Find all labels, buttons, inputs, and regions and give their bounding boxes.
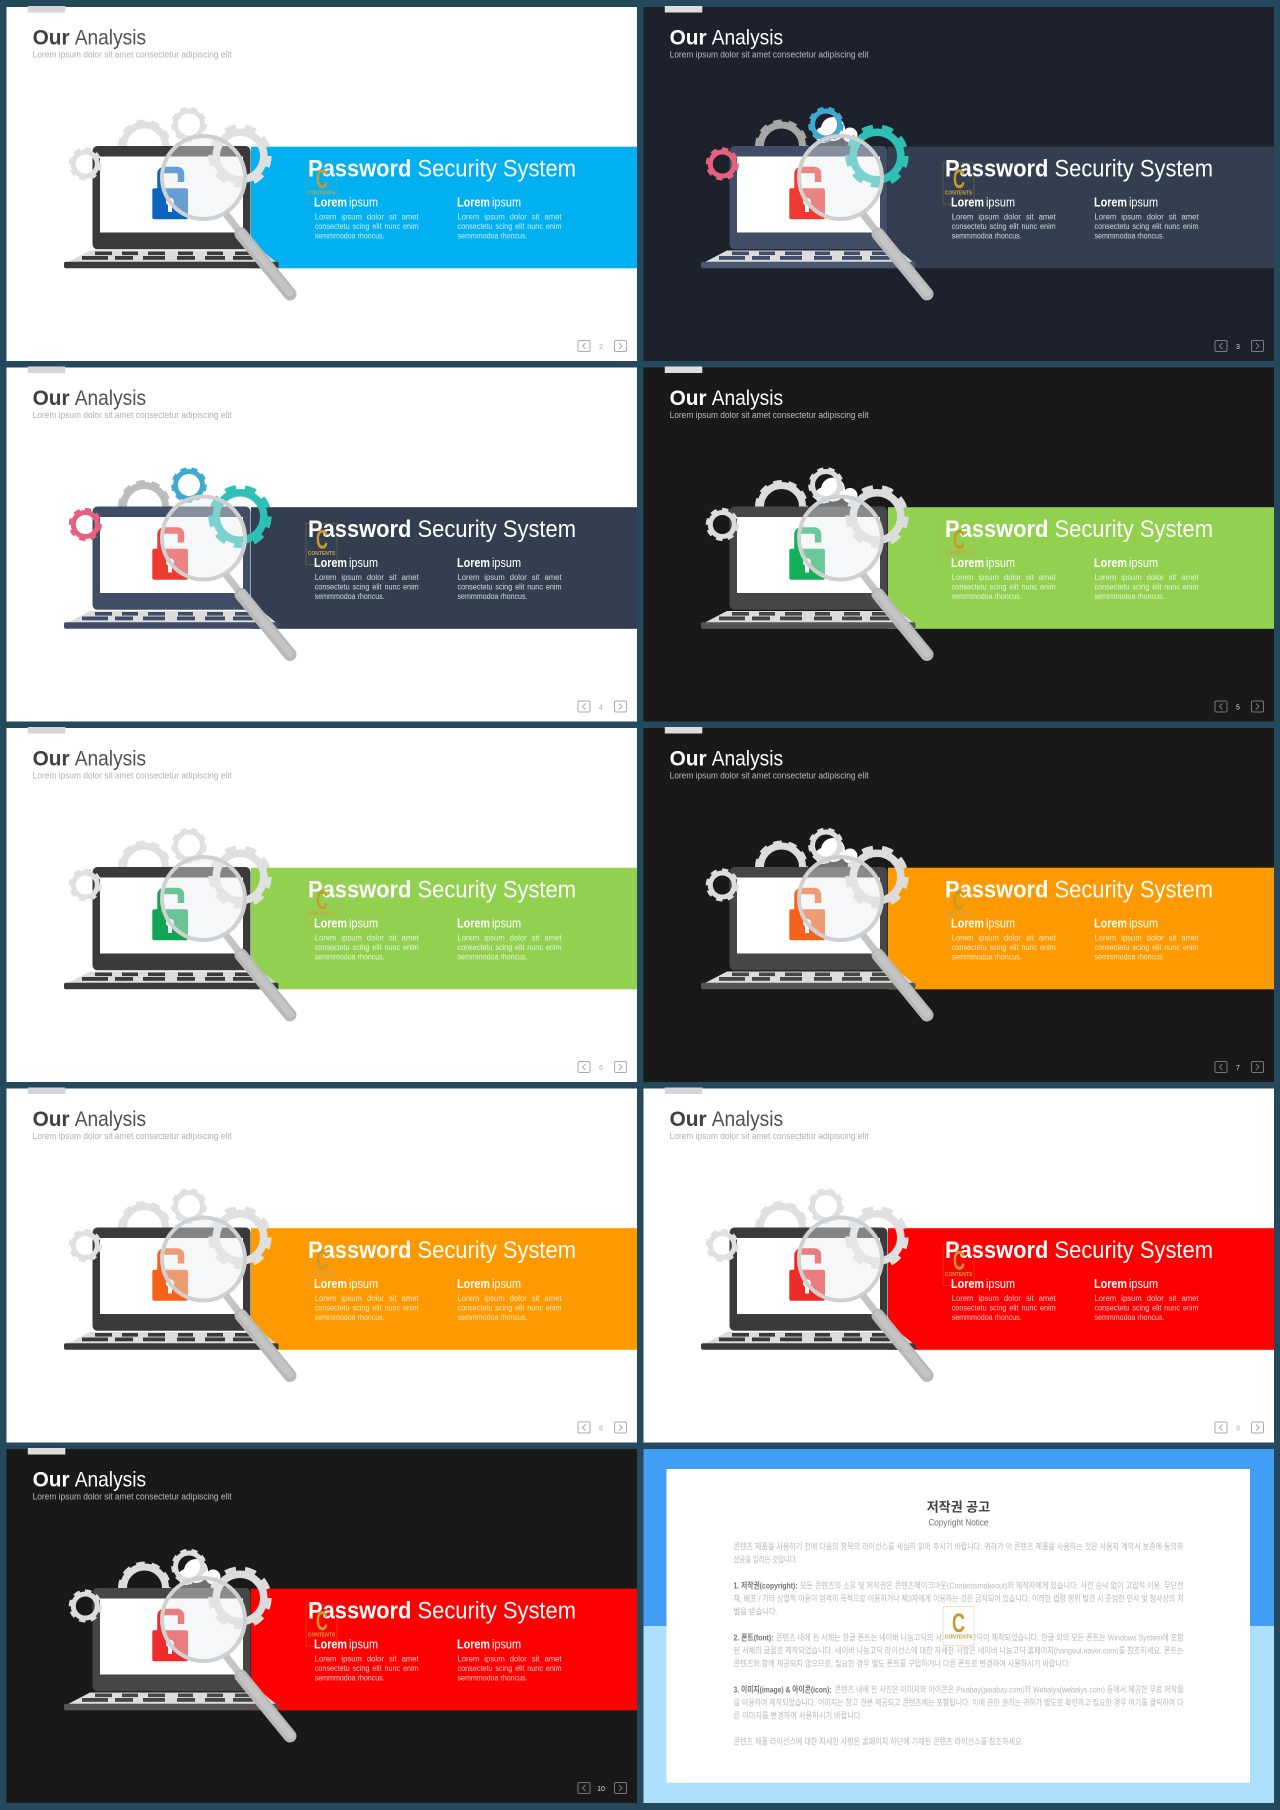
watermark: CONTENTS bbox=[945, 551, 973, 557]
slide: page 9 white with red band bbox=[644, 1088, 1274, 1442]
column 1 text: consectetu scing elit nunc enim bbox=[952, 582, 1056, 592]
title bbox=[670, 386, 783, 410]
column 1 text: semmmodoa rhoncus. bbox=[952, 592, 1022, 601]
column 1 text: Lorem bbox=[951, 556, 984, 570]
notice body text bbox=[734, 1541, 1184, 1747]
title: Our bbox=[33, 386, 70, 410]
column 2 text: Lorem ipsum dolor sit amet bbox=[458, 1294, 562, 1303]
title: Our bbox=[670, 25, 707, 49]
column 1 text: Lorem bbox=[951, 1277, 984, 1291]
column 1 text: semmmodoa rhoncus. bbox=[315, 231, 385, 240]
column 1 text: semmmodoa rhoncus. bbox=[315, 1673, 385, 1682]
slide navigation bbox=[578, 701, 626, 712]
column 2 text: semmmodoa rhoncus. bbox=[458, 952, 528, 961]
slide: page 5 black with green band bbox=[644, 366, 1274, 722]
heading: Security System bbox=[1054, 877, 1213, 904]
heading: Password bbox=[945, 877, 1048, 904]
illustration: laptop, gears, lock and magnifier bbox=[701, 1190, 927, 1376]
watermark: CONTENTS bbox=[308, 190, 336, 196]
slide navigation: 10 bbox=[597, 1786, 605, 1793]
column 2 text: consectetu scing elit nunc enim bbox=[458, 222, 562, 231]
column 2 text bbox=[1094, 196, 1199, 240]
notice body text: 셨음을 알리는 것입니다. bbox=[734, 1554, 798, 1564]
subtitle: Lorem ipsum dolor sit amet consectetur adipiscing elit bbox=[33, 770, 232, 780]
column 1 text: semmmodoa rhoncus. bbox=[315, 952, 385, 961]
column 1 text bbox=[314, 1638, 419, 1682]
column 2 text: ipsum bbox=[1129, 1277, 1158, 1291]
title bbox=[670, 1107, 783, 1131]
title bbox=[33, 1467, 146, 1491]
column 2 text: Lorem bbox=[1094, 556, 1127, 570]
subtitle: Lorem ipsum dolor sit amet consectetur adipiscing elit bbox=[670, 1131, 869, 1141]
slide navigation: 2 bbox=[599, 344, 603, 351]
slide navigation: 9 bbox=[1236, 1426, 1240, 1432]
watermark bbox=[306, 163, 337, 204]
column 1 text: Lorem bbox=[951, 196, 984, 210]
slide navigation bbox=[1215, 701, 1264, 712]
colour band bbox=[888, 147, 1274, 268]
column 2 text: semmmodoa rhoncus. bbox=[1094, 1313, 1164, 1322]
watermark: C bbox=[316, 1246, 328, 1276]
heading bbox=[308, 516, 576, 543]
subtitle: Lorem ipsum dolor sit amet consectetur adipiscing elit bbox=[670, 770, 869, 780]
subtitle: Lorem ipsum dolor sit amet consectetur adipiscing elit bbox=[33, 410, 232, 420]
watermark bbox=[943, 1607, 974, 1646]
top accent bar bbox=[28, 366, 65, 373]
watermark: C bbox=[952, 1608, 965, 1638]
heading bbox=[945, 156, 1213, 183]
watermark: C bbox=[953, 885, 965, 915]
column 1 text: semmmodoa rhoncus. bbox=[952, 231, 1022, 240]
heading bbox=[308, 1598, 576, 1625]
slide: page 3 navy with slate band bbox=[644, 6, 1274, 361]
illustration: laptop, gears, lock and magnifier bbox=[64, 468, 290, 654]
watermark: C bbox=[953, 164, 965, 194]
heading bbox=[308, 156, 576, 183]
column 1 text bbox=[951, 1277, 1056, 1322]
slide navigation bbox=[578, 340, 626, 352]
title bbox=[33, 25, 146, 49]
column 2 text: Lorem bbox=[1094, 196, 1127, 210]
title: Analysis bbox=[75, 386, 146, 410]
title: Analysis bbox=[75, 1107, 146, 1131]
column 2 text bbox=[457, 556, 562, 601]
heading: Security System bbox=[1054, 516, 1213, 543]
slide navigation: 3 bbox=[1236, 344, 1240, 351]
title: Our bbox=[670, 1107, 707, 1131]
column 1 text bbox=[951, 556, 1056, 601]
column 2 text: Lorem bbox=[457, 556, 490, 570]
column 2 text: consectetu scing elit nunc enim bbox=[458, 1664, 562, 1673]
title bbox=[33, 1107, 146, 1131]
heading: Security System bbox=[418, 1598, 576, 1625]
top accent bar bbox=[665, 6, 702, 12]
column 1 text: semmmodoa rhoncus. bbox=[315, 1313, 385, 1322]
title: Analysis bbox=[712, 25, 783, 49]
column 1 text: Lorem ipsum dolor sit amet bbox=[952, 933, 1056, 942]
column 1 text bbox=[314, 196, 419, 240]
illustration: laptop, gears, lock and magnifier bbox=[701, 829, 927, 1015]
top accent bar bbox=[28, 6, 65, 12]
title: Analysis bbox=[712, 1107, 783, 1131]
column 1 text bbox=[314, 917, 419, 961]
title: Analysis bbox=[75, 1467, 146, 1491]
notice body text: 콘텐츠 제품 라이선스에 대한 자세한 사항은 홈페이지 하단에 기재된 콘텐츠 라이선스를 참조하세요. bbox=[734, 1736, 1024, 1747]
column 2 text bbox=[1094, 556, 1199, 601]
column 1 text bbox=[951, 196, 1056, 240]
watermark bbox=[306, 524, 337, 564]
column 2 text: Lorem ipsum dolor sit amet bbox=[458, 1654, 562, 1663]
column 1 text: Lorem ipsum dolor sit amet bbox=[315, 1654, 419, 1663]
column 2 text bbox=[457, 917, 562, 961]
slide navigation bbox=[1215, 1062, 1264, 1072]
subtitle: Lorem ipsum dolor sit amet consectetur adipiscing elit bbox=[33, 1491, 232, 1501]
column 1 text: Lorem bbox=[314, 917, 347, 931]
watermark: C bbox=[953, 1246, 965, 1276]
column 1 text: consectetu scing elit nunc enim bbox=[315, 222, 419, 231]
notice body text: 1. 저작권(copyright): bbox=[734, 1580, 798, 1591]
slide navigation: 8 bbox=[599, 1426, 603, 1432]
watermark: CONTENTS bbox=[308, 551, 336, 557]
title: Analysis bbox=[712, 746, 783, 770]
heading: Password bbox=[308, 156, 411, 183]
heading: Password bbox=[308, 1237, 411, 1264]
column 1 text: Lorem ipsum dolor sit amet bbox=[315, 573, 419, 582]
heading: Security System bbox=[418, 877, 576, 904]
subtitle: Lorem ipsum dolor sit amet consectetur adipiscing elit bbox=[33, 1131, 232, 1141]
heading bbox=[945, 516, 1213, 543]
column 1 text: ipsum bbox=[349, 1277, 378, 1291]
column 2 text: Lorem bbox=[457, 917, 490, 931]
notice body text: 벌을 받습니다. bbox=[734, 1607, 778, 1617]
column 2 text: consectetu scing elit nunc enim bbox=[1094, 1304, 1199, 1312]
column 1 text: ipsum bbox=[349, 556, 378, 570]
top accent bar bbox=[28, 1088, 65, 1094]
top accent bar bbox=[28, 1448, 65, 1454]
column 2 text: consectetu scing elit nunc enim bbox=[1094, 943, 1199, 952]
slide: page 7 black with orange band bbox=[644, 727, 1274, 1082]
column 1 text: semmmodoa rhoncus. bbox=[952, 1313, 1022, 1322]
illustration: laptop, gears, lock and magnifier bbox=[64, 108, 290, 294]
column 1 text: consectetu scing elit nunc enim bbox=[315, 943, 419, 952]
heading: Password bbox=[945, 156, 1048, 183]
column 1 text: Lorem bbox=[951, 917, 984, 931]
slide: page 6 white with green band bbox=[6, 727, 637, 1082]
heading: Password bbox=[308, 877, 411, 904]
two-tone blue background bbox=[644, 1449, 1274, 1803]
notice body text: 콘텐츠와 함께 제공되지 않으므로, 필요한 경우 별도 폰트를 구입하거나 다른 폰트로 변경하여 사용하시기 바랍니다. bbox=[734, 1657, 1070, 1668]
subtitle: Lorem ipsum dolor sit amet consectetur adipiscing elit bbox=[33, 49, 232, 59]
column 1 text: consectetu scing elit nunc enim bbox=[952, 222, 1056, 231]
column 2 text: semmmodoa rhoncus. bbox=[458, 231, 528, 240]
watermark bbox=[306, 1605, 337, 1646]
column 2 text: semmmodoa rhoncus. bbox=[458, 592, 528, 601]
slide navigation: 6 bbox=[599, 1065, 603, 1072]
title bbox=[33, 746, 146, 770]
column 2 text: Lorem ipsum dolor sit amet bbox=[458, 212, 562, 221]
notice body text: 콘텐츠 제품을 사용하기 전에 다음의 항목의 라이선스를 세심히 읽어 주시기 바랍니다. 귀하가 이 콘텐츠 제품을 사용하는 것은 사용자 계약서 보증에 동의하 bbox=[734, 1541, 1184, 1552]
watermark bbox=[943, 524, 974, 564]
column 1 text: ipsum bbox=[986, 556, 1015, 570]
column 1 text: ipsum bbox=[986, 1277, 1015, 1291]
column 1 text: consectetu scing elit nunc enim bbox=[952, 1304, 1056, 1312]
heading: Security System bbox=[1054, 156, 1213, 183]
illustration: laptop, gears, lock and magnifier bbox=[701, 468, 927, 654]
slide navigation bbox=[578, 1422, 626, 1433]
watermark bbox=[943, 163, 974, 204]
watermark: C bbox=[316, 164, 328, 194]
column 2 text: ipsum bbox=[1129, 556, 1158, 570]
column 2 text: Lorem bbox=[1094, 917, 1127, 931]
slide: copyright notice bbox=[644, 1449, 1274, 1803]
notice subheading: Copyright Notice bbox=[928, 1518, 988, 1528]
colour band bbox=[251, 868, 637, 989]
column 1 text: semmmodoa rhoncus. bbox=[952, 952, 1022, 961]
column 1 text: ipsum bbox=[349, 917, 378, 931]
watermark: CONTENTS bbox=[308, 912, 336, 918]
column 1 text: ipsum bbox=[986, 196, 1015, 210]
watermark bbox=[943, 1244, 974, 1286]
subtitle: Lorem ipsum dolor sit amet consectetur adipiscing elit bbox=[670, 410, 869, 420]
column 1 text: Lorem ipsum dolor sit amet bbox=[952, 1294, 1056, 1303]
column 2 text: Lorem bbox=[457, 1277, 490, 1291]
heading: Security System bbox=[418, 516, 576, 543]
heading: Password bbox=[308, 1598, 411, 1625]
watermark: C bbox=[316, 885, 328, 915]
column 1 text: ipsum bbox=[349, 1638, 378, 1652]
column 2 text: ipsum bbox=[492, 1277, 521, 1291]
notice heading: 저작권 공고 bbox=[927, 1500, 990, 1515]
title: Analysis bbox=[75, 25, 146, 49]
column 1 text: ipsum bbox=[349, 196, 378, 210]
column 2 text bbox=[1094, 917, 1199, 961]
column 2 text bbox=[457, 1277, 562, 1322]
heading: Security System bbox=[418, 156, 576, 183]
illustration: laptop, gears, lock and magnifier bbox=[64, 1190, 290, 1376]
notice body text: 3. 이미지(image) & 아이콘(icon): bbox=[734, 1684, 832, 1694]
heading: Security System bbox=[418, 1237, 576, 1264]
heading: Password bbox=[945, 1237, 1048, 1264]
column 2 text: consectetu scing elit nunc enim bbox=[1094, 222, 1199, 231]
column 1 text: ipsum bbox=[986, 917, 1015, 931]
heading bbox=[945, 877, 1213, 904]
column 2 text: ipsum bbox=[492, 1638, 521, 1652]
notice body text: 된 서체의 글꼴로 제작되었습니다. 네이버 나눔고딕 라이선스에 대한 자세한 사항은 네이버 나눔고딕 홈페이지(hangeul.naver.com)를 참조하세요. 폰트는 bbox=[734, 1645, 1184, 1656]
illustration: laptop, gears, lock and magnifier bbox=[64, 1550, 290, 1736]
title: Our bbox=[33, 25, 70, 49]
top accent bar bbox=[665, 727, 702, 734]
watermark: CONTENTS bbox=[308, 1272, 336, 1278]
column 2 text: ipsum bbox=[492, 917, 521, 931]
column 2 text: Lorem ipsum dolor sit amet bbox=[458, 933, 562, 942]
heading: Password bbox=[945, 516, 1048, 543]
column 2 text: consectetu scing elit nunc enim bbox=[458, 1304, 562, 1312]
colour band bbox=[888, 1228, 1274, 1350]
title bbox=[670, 25, 783, 49]
notice body text: 을 이용하여 제작되었습니다. 이미지는 참고 견본 제공되고 콘텐츠에는 포함됩니다. 이에 관한 권리는 귀하가 별도로 확인하고 필요한 경우 여기를 클릭하여 다 bbox=[734, 1697, 1184, 1708]
column 2 text: Lorem bbox=[457, 1638, 490, 1652]
column 2 text: Lorem ipsum dolor sit amet bbox=[1094, 573, 1199, 582]
heading: Security System bbox=[1054, 1237, 1213, 1264]
top accent bar bbox=[665, 366, 702, 373]
watermark: C bbox=[316, 524, 328, 554]
column 1 text: consectetu scing elit nunc enim bbox=[315, 1664, 419, 1673]
illustration: laptop, gears, lock and magnifier bbox=[701, 108, 927, 294]
notice body text: 모든 콘텐츠의 소유 및 저작권은 콘텐츠메이크아웃(Contentsmakeout)와 제작자에게 있습니다. 사전 승낙 없이 고압적 이용, 무단전 bbox=[800, 1580, 1184, 1591]
title: Our bbox=[670, 746, 707, 770]
slide navigation bbox=[1215, 1422, 1264, 1433]
colour band bbox=[251, 507, 637, 629]
column 2 text: semmmodoa rhoncus. bbox=[458, 1313, 528, 1322]
heading bbox=[308, 877, 576, 904]
column 2 text: Lorem ipsum dolor sit amet bbox=[458, 573, 562, 582]
slide: page 8 white with orange band bbox=[6, 1088, 637, 1442]
slide navigation bbox=[578, 1062, 626, 1072]
watermark bbox=[306, 884, 337, 925]
watermark: CONTENTS bbox=[945, 912, 973, 918]
column 1 text: consectetu scing elit nunc enim bbox=[315, 1304, 419, 1312]
white notice panel bbox=[666, 1469, 1250, 1783]
column 1 text: Lorem ipsum dolor sit amet bbox=[315, 933, 419, 942]
column 2 text bbox=[457, 1638, 562, 1682]
column 2 text: ipsum bbox=[1129, 196, 1158, 210]
notice body text: 콘텐츠 내에 된 사진은 이미지와 아이콘은 Pixabay(pixabay.com)와 Webalys(webalys.com) 등에서 제공한 무료 저작물 bbox=[835, 1683, 1184, 1694]
title: Our bbox=[33, 746, 70, 770]
column 1 text: consectetu scing elit nunc enim bbox=[315, 582, 419, 592]
watermark: CONTENTS bbox=[945, 1272, 973, 1278]
watermark: C bbox=[953, 524, 965, 554]
colour band bbox=[251, 1228, 637, 1350]
column 1 text: semmmodoa rhoncus. bbox=[315, 592, 385, 601]
column 1 text: Lorem bbox=[314, 196, 347, 210]
illustration: laptop, gears, lock and magnifier bbox=[64, 829, 290, 1015]
title bbox=[33, 386, 146, 410]
title: Our bbox=[33, 1107, 70, 1131]
watermark: C bbox=[316, 1606, 328, 1636]
slide navigation bbox=[578, 1782, 626, 1794]
heading bbox=[945, 1237, 1213, 1264]
slide: page 10 black with red band bbox=[6, 1448, 637, 1803]
column 1 text: Lorem ipsum dolor sit amet bbox=[315, 212, 419, 221]
column 1 text: Lorem ipsum dolor sit amet bbox=[315, 1294, 419, 1303]
colour band bbox=[888, 507, 1274, 629]
notice body text: 콘텐츠 내에 된 서체는 한글 폰트는 네이버 나눔고딕의 서체와 나눔고딕이 제작되었습니다. 한글 외의 모든 폰트는 Windows System에 포함 bbox=[776, 1631, 1184, 1642]
colour band bbox=[888, 868, 1274, 989]
slide navigation bbox=[1215, 340, 1264, 352]
column 2 text: Lorem bbox=[457, 196, 490, 210]
column 2 text bbox=[1094, 1277, 1199, 1322]
column 2 text: Lorem ipsum dolor sit amet bbox=[1094, 933, 1199, 942]
column 1 text bbox=[951, 917, 1056, 961]
column 2 text: consectetu scing elit nunc enim bbox=[458, 582, 562, 592]
title: Analysis bbox=[712, 386, 783, 410]
subtitle: Lorem ipsum dolor sit amet consectetur adipiscing elit bbox=[670, 49, 869, 59]
column 1 text: consectetu scing elit nunc enim bbox=[952, 943, 1056, 952]
top accent bar bbox=[665, 1088, 702, 1094]
column 2 text: Lorem bbox=[1094, 1277, 1127, 1291]
top accent bar bbox=[28, 727, 65, 734]
column 2 text: semmmodoa rhoncus. bbox=[1094, 952, 1164, 961]
title: Analysis bbox=[75, 746, 146, 770]
slide: page 4 white with slate band bbox=[6, 366, 637, 722]
slide navigation: 7 bbox=[1236, 1065, 1240, 1072]
title: Our bbox=[670, 386, 707, 410]
column 2 text bbox=[457, 196, 562, 240]
column 1 text bbox=[314, 556, 419, 601]
column 1 text: Lorem bbox=[314, 1638, 347, 1652]
column 2 text: consectetu scing elit nunc enim bbox=[1094, 582, 1199, 592]
column 2 text: semmmodoa rhoncus. bbox=[1094, 231, 1164, 240]
column 2 text: Lorem ipsum dolor sit amet bbox=[1094, 212, 1199, 221]
column 2 text: semmmodoa rhoncus. bbox=[458, 1673, 528, 1682]
notice body text: 2. 폰트(font): bbox=[734, 1632, 774, 1642]
watermark: CONTENTS bbox=[945, 190, 973, 196]
colour band bbox=[251, 1589, 637, 1710]
column 2 text: semmmodoa rhoncus. bbox=[1094, 592, 1164, 601]
watermark bbox=[943, 884, 974, 925]
title bbox=[670, 746, 783, 770]
column 1 text: Lorem bbox=[314, 1277, 347, 1291]
notice body text: 른 이미지를 변경하여 사용하시기 바랍니다. bbox=[734, 1710, 862, 1721]
slide: page 2 white with blue band bbox=[6, 6, 637, 361]
column 1 text: Lorem ipsum dolor sit amet bbox=[952, 573, 1056, 582]
notice body text: 재, 배포 / 기타 상업적 이용이 엄격히 목적으로 이용하거나 제3자에게 이용하는 것은 금지되어 있습니다. 이러한 법령 행위 발견 시 준엄한 민사 및 형사상의 처 bbox=[734, 1593, 1184, 1604]
heading bbox=[308, 1237, 576, 1264]
watermark bbox=[306, 1244, 337, 1286]
watermark: CONTENTS bbox=[308, 1632, 336, 1638]
title: Our bbox=[33, 1467, 70, 1491]
heading: Password bbox=[308, 516, 411, 543]
watermark: CONTENTS bbox=[945, 1634, 973, 1640]
column 1 text: Lorem bbox=[314, 556, 347, 570]
column 2 text: ipsum bbox=[1129, 917, 1158, 931]
column 2 text: consectetu scing elit nunc enim bbox=[458, 943, 562, 952]
column 2 text: ipsum bbox=[492, 196, 521, 210]
column 1 text: Lorem ipsum dolor sit amet bbox=[952, 212, 1056, 221]
slide navigation: 4 bbox=[599, 704, 603, 712]
column 2 text: Lorem ipsum dolor sit amet bbox=[1094, 1294, 1199, 1303]
column 1 text bbox=[314, 1277, 419, 1322]
colour band bbox=[251, 147, 637, 268]
slide navigation: 5 bbox=[1236, 704, 1240, 712]
column 2 text: ipsum bbox=[492, 556, 521, 570]
